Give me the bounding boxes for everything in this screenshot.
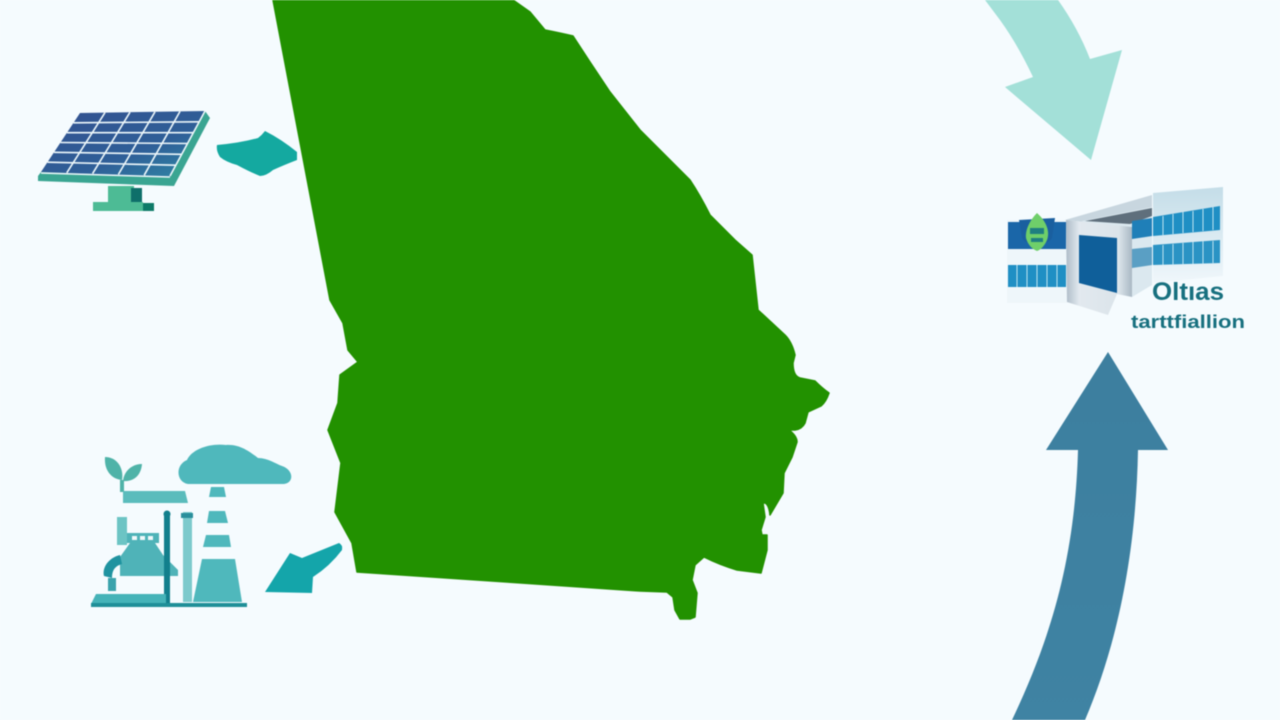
left wing (1007, 220, 1067, 303)
leaves (105, 457, 142, 492)
right wing (1153, 187, 1223, 283)
plant body (104, 517, 178, 591)
label: building heading: Oltıas (1152, 278, 1224, 306)
cloud (178, 445, 291, 484)
doorway frame (1066, 220, 1132, 315)
ground platform (91, 594, 247, 607)
arrow: large blue rising (1012, 352, 1168, 720)
emblem (1019, 213, 1055, 251)
striped chimney (193, 487, 242, 602)
icon: solar panel (38, 111, 210, 211)
arrow: solar panel to map (217, 131, 297, 176)
icon: building (1007, 187, 1223, 315)
label: building subheading: tarttfiallion (1131, 312, 1245, 332)
map: Georgia state silhouette (273, 0, 829, 619)
arrow: map to factory (265, 543, 342, 593)
doorway (1079, 235, 1117, 293)
solar panel cells (41, 111, 205, 177)
pipes (164, 510, 193, 604)
solar panel stand (93, 186, 154, 211)
roof and recess (1065, 195, 1152, 297)
icon: factory with cloud and leaves (91, 445, 291, 607)
arrow: top pale teal (985, 0, 1122, 160)
solar panel frame (38, 111, 210, 186)
horizontal duct (123, 491, 188, 503)
